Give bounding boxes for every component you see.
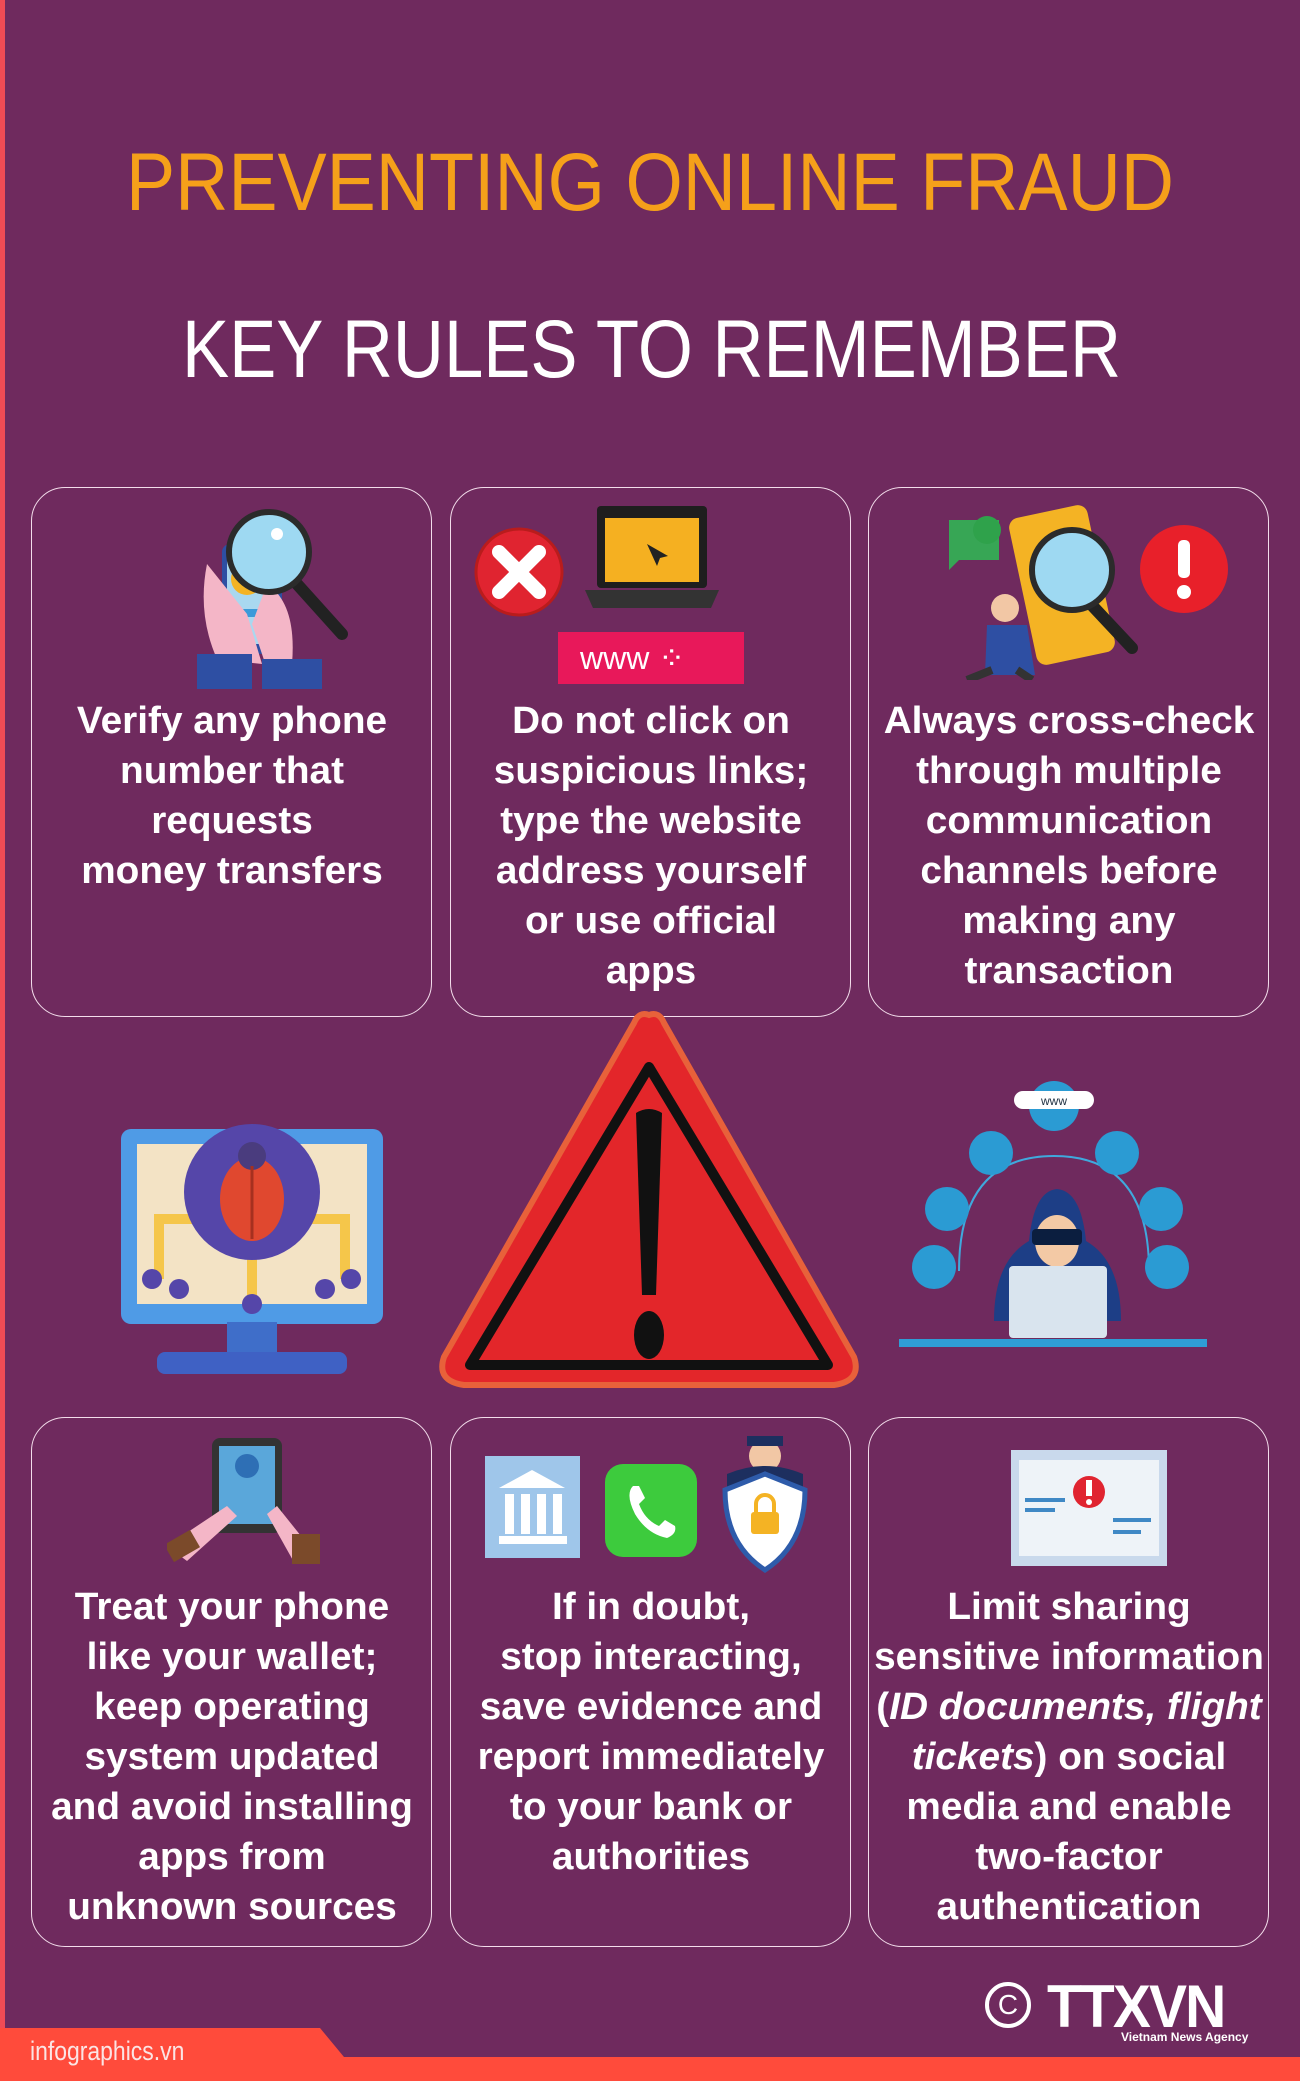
icon: laptop [585, 506, 719, 608]
text: verify: money transfers [81, 850, 383, 892]
panel: if in doubt [450, 1417, 851, 1947]
text: limit: authentication [937, 1886, 1201, 1928]
text: limit: tickets) on social [912, 1736, 1226, 1778]
text: verify: number that [120, 750, 344, 792]
text: doubt: to your bank or [510, 1786, 792, 1828]
text: limit: sensitive information [874, 1636, 1264, 1678]
text: limit: Limit sharing [947, 1586, 1191, 1628]
text: verify: requests [151, 800, 313, 842]
icon: phone with magnifier [197, 509, 348, 689]
logo: TTXVN: Vietnam News Agency [1121, 2030, 1248, 2044]
panel: verify phone [31, 487, 432, 1017]
text: wallet: apps from [138, 1836, 326, 1878]
text: doubt: If in doubt, [552, 1586, 750, 1628]
footer text: infographics.vn [30, 2036, 184, 2066]
icon: hacker: www [1040, 1094, 1067, 1108]
panel: phone like wallet [31, 1417, 432, 1947]
icon: hacker [899, 1081, 1207, 1347]
title: KEY RULES TO REMEMBER [182, 304, 1121, 395]
title: PREVENTING ONLINE FRAUD [126, 137, 1174, 228]
icon: bug monitor [121, 1124, 383, 1374]
title [126, 137, 1174, 395]
text: links: type the website [500, 800, 802, 842]
icon: bank [485, 1456, 580, 1558]
text: doubt: authorities [552, 1836, 750, 1878]
icon: chat phone magnifier [949, 505, 1138, 680]
text: doubt [478, 1586, 824, 1878]
text: cross-check: Always cross-check [884, 700, 1254, 742]
icon: phone with magnifier: $ [241, 570, 251, 590]
icon: phone call [605, 1464, 697, 1557]
icon: www bar: www ⁘ [580, 640, 685, 676]
text: links [494, 700, 808, 992]
text: wallet: keep operating [94, 1686, 370, 1728]
text: wallet: and avoid installing [51, 1786, 413, 1828]
text: limit [874, 1586, 1264, 1928]
text: links: apps [606, 950, 696, 992]
text: verify: Verify any phone [77, 700, 387, 742]
text: cross-check: channels before [920, 850, 1218, 892]
text: wallet [51, 1586, 413, 1928]
text: doubt: report immediately [478, 1736, 824, 1778]
text: links: address yourself [496, 850, 806, 892]
logo: TTXVN: TTXVN [1047, 1973, 1224, 2040]
logo: TTXVN: C [998, 1989, 1018, 2020]
text: cross-check: through multiple [916, 750, 1222, 792]
left red edge [0, 0, 5, 2081]
text: cross-check: transaction [965, 950, 1173, 992]
text: wallet: unknown sources [67, 1886, 397, 1928]
text: cross-check [884, 700, 1254, 992]
text: limit: two-factor [975, 1836, 1163, 1878]
text: limit: media and enable [906, 1786, 1232, 1828]
text: limit: (ID documents, flight [876, 1686, 1262, 1728]
icon: police shield [722, 1436, 808, 1573]
text: doubt: stop interacting, [500, 1636, 802, 1678]
text: cross-check: communication [926, 800, 1212, 842]
text: cross-check: making any [962, 900, 1176, 942]
text: verify [77, 700, 387, 892]
icon: red X [474, 528, 564, 616]
text: wallet: system updated [84, 1736, 380, 1778]
footer bar [0, 2028, 1300, 2081]
panel: limit sharing [868, 1417, 1269, 1947]
text: wallet: Treat your phone [75, 1586, 389, 1628]
text: wallet: like your wallet; [87, 1636, 377, 1678]
text: links: Do not click on [512, 700, 790, 742]
icon: screen alert [1011, 1450, 1167, 1566]
panel: cross-check [868, 487, 1269, 1017]
text: links: or use official [525, 900, 777, 942]
icon: tablet hands [167, 1438, 320, 1564]
logo: TTXVN [985, 1973, 1248, 2044]
icon: warning triangle [439, 1011, 859, 1388]
text: links: suspicious links; [494, 750, 808, 792]
icon: red exclamation circle [1140, 525, 1228, 613]
panel: suspicious links [450, 487, 851, 1017]
text: doubt: save evidence and [480, 1686, 822, 1728]
icon: www bar [558, 632, 744, 684]
